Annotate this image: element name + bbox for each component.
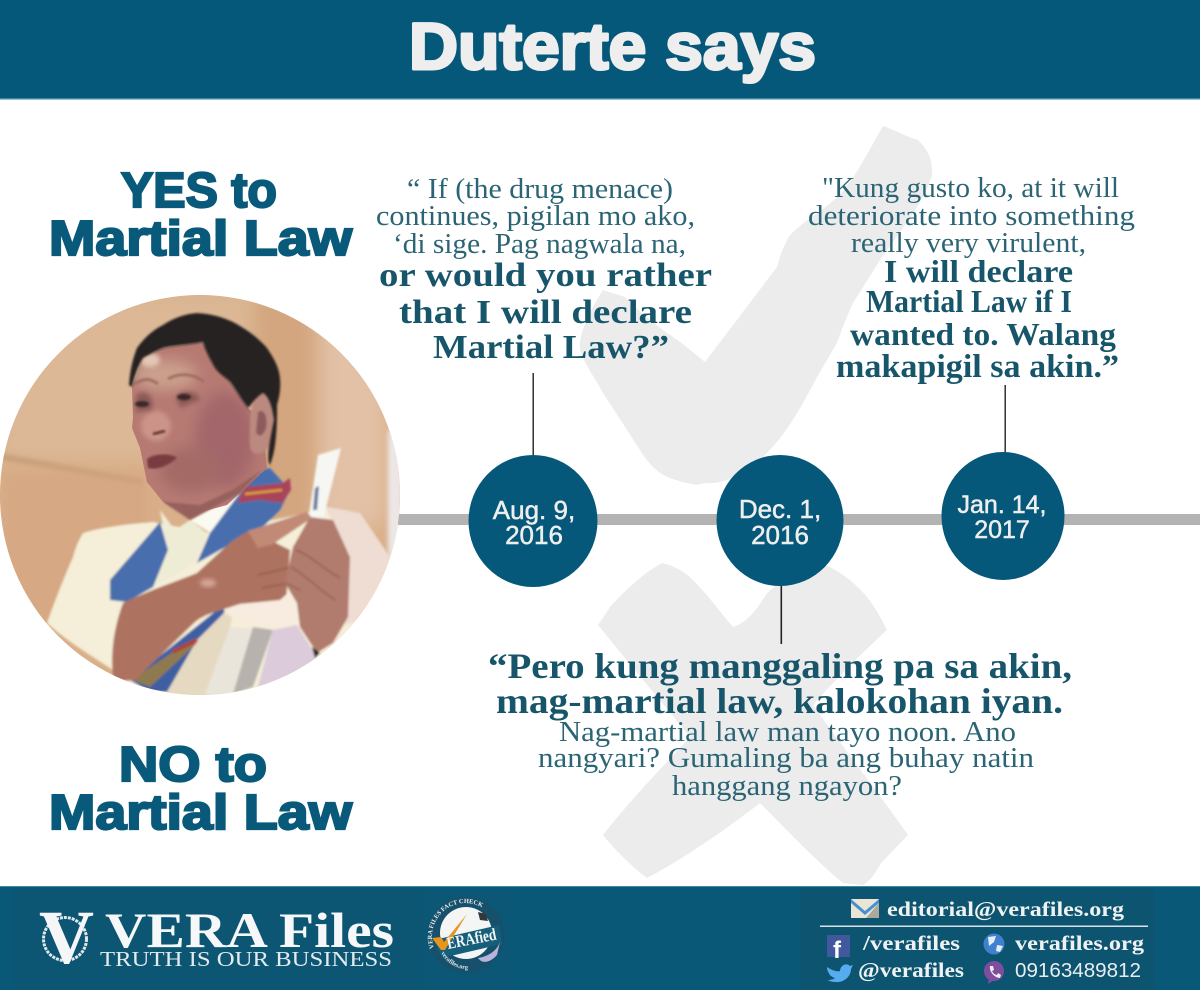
- quote text: [488, 646, 1072, 802]
- quote text: continues, pigilan mo ako,: [376, 200, 695, 232]
- date circle: [468, 455, 598, 587]
- quote text: [808, 172, 1135, 385]
- neck: [163, 470, 262, 520]
- quote text: hanggang ngayon?: [672, 770, 902, 802]
- quote text: that I will declare: [399, 294, 692, 331]
- event: Aug. 9, 2016: [376, 173, 712, 587]
- quote text: or would you rather: [379, 257, 712, 294]
- connector line: [1004, 385, 1006, 454]
- quote text: nangyari? Gumaling ba ang buhay natin: [538, 742, 1035, 774]
- quote text: makapigil sa akin.”: [836, 349, 1119, 385]
- logo emblem: V: [39, 896, 94, 980]
- email: editorial@verafiles.org: [887, 897, 1125, 921]
- face: [132, 342, 267, 511]
- badge: VERAfied: VERA FILES FACT CHECK: [428, 898, 484, 950]
- quote text: ‘di sige. Pag nagwala na,: [393, 228, 686, 260]
- logo: VERA Files: [39, 896, 394, 980]
- heading: no to martial law: NO to: [119, 738, 267, 792]
- icon: facebook: [827, 935, 850, 964]
- portrait photo illustration: [0, 295, 402, 710]
- date circle: Aug. 9,: [493, 495, 575, 525]
- quote text: "Kung gusto ko, at it will: [822, 172, 1119, 204]
- panels: [206, 628, 252, 694]
- title: Duterte says: [409, 9, 816, 83]
- heading: no to martial law: Martial Law: [49, 786, 353, 840]
- logo: VERA Files: TRUTH IS OUR BUSINESS: [100, 947, 392, 971]
- icon: facebook: f: [833, 937, 842, 964]
- date circle: 2017: [974, 516, 1030, 544]
- finger creases: [258, 550, 340, 600]
- phone number: 09163489812: [1015, 960, 1141, 982]
- website: verafiles.org: [1015, 931, 1145, 955]
- icon: viber: [984, 961, 1004, 984]
- quote text: Martial Law?”: [433, 329, 669, 366]
- sash right: [197, 468, 290, 563]
- quote text: [376, 173, 712, 366]
- ear: [250, 393, 276, 454]
- contact block: [820, 897, 1148, 984]
- date circle: Jan. 14,: [958, 491, 1046, 519]
- date circle: [716, 455, 844, 586]
- quote text: wanted to. Walang: [850, 316, 1116, 352]
- heading: yes to martial law: Martial Law: [49, 212, 353, 266]
- icon: twitter: [827, 964, 853, 982]
- pointing finger: [248, 512, 312, 548]
- date circle: 2016: [751, 520, 809, 550]
- icon: envelope: [851, 899, 879, 918]
- twitter handle: @verafiles: [858, 958, 964, 982]
- icon: globe: [984, 934, 1004, 954]
- upper paper: [308, 448, 341, 520]
- heading: yes to martial law: YES to: [121, 164, 277, 218]
- hair: [129, 313, 280, 465]
- badge: VERAfied: ERAfied: [445, 925, 498, 953]
- lower sash: [130, 606, 225, 692]
- holding hand: [285, 517, 350, 653]
- sash left: [110, 522, 168, 602]
- quote text: “Pero kung manggaling pa sa akin,: [488, 646, 1072, 686]
- quote text: deteriorate into something: [808, 200, 1135, 232]
- watermark: X mark: [598, 563, 908, 885]
- date circle: 2016: [505, 520, 563, 550]
- quote text: Nag-martial law man tayo noon. Ano: [559, 716, 1016, 748]
- event: Dec. 1, 2016: [488, 455, 1072, 802]
- badge: VERAfied: [428, 897, 504, 973]
- forearm: [112, 530, 290, 681]
- heading: yes to martial law: [49, 164, 353, 266]
- connector line: [780, 584, 782, 644]
- connector line: [532, 373, 534, 457]
- date circle: Dec. 1,: [739, 494, 821, 524]
- quote text: I will declare: [884, 253, 1073, 289]
- quote text: Martial Law if I: [866, 283, 1072, 319]
- footer band: [0, 886, 1200, 990]
- event: Jan. 14, 2017: [808, 172, 1135, 580]
- quote text: mag-martial law, kalokohan iyan.: [496, 681, 1063, 721]
- shirt: [159, 510, 206, 533]
- quote text: really very virulent,: [851, 227, 1086, 259]
- badge: VERAfied: verafiles.org: [442, 952, 468, 971]
- header band: [0, 0, 1200, 100]
- heading: no to martial law: [49, 738, 353, 840]
- facebook handle: /verafiles: [862, 931, 960, 955]
- jacket: [46, 508, 356, 692]
- quote text: “ If (the drug menace): [407, 173, 673, 205]
- date circle: [942, 452, 1064, 580]
- watermark: check mark: [580, 126, 932, 485]
- timeline bar: [398, 514, 1200, 525]
- lower paper: [222, 594, 288, 614]
- logo: VERA Files: VERA Files: [105, 902, 394, 958]
